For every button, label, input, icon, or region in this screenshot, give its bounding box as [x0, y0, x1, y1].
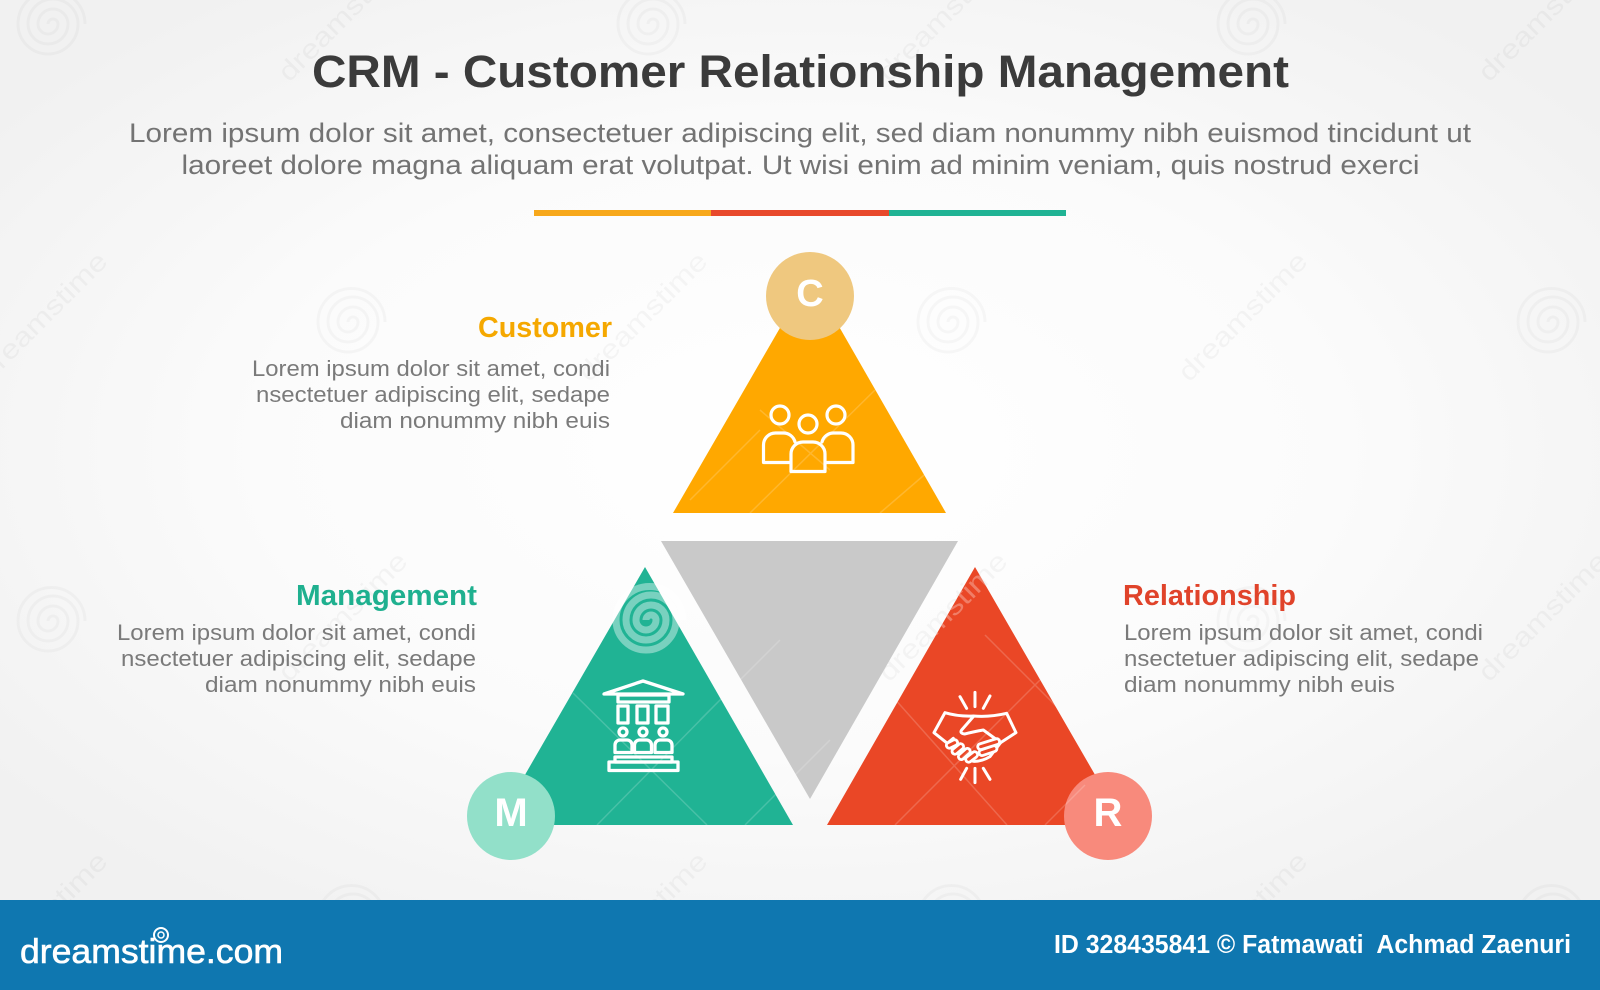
icon: handshake [934, 692, 1016, 783]
green triangle [496, 567, 793, 825]
circle badge C [766, 252, 854, 340]
circle badge R [1064, 772, 1152, 860]
footer credit: ID 328435841 © Fatmawati Achmad Zaenuri [1054, 931, 1571, 959]
circle badge R: R [1094, 791, 1123, 835]
tricolor divider [534, 210, 1066, 216]
subtitle: Lorem ipsum dolor sit amet, consectetuer adipiscing elit, sed diam nonummy nibh euismod tincidunt ut [129, 118, 1472, 148]
text block: customer: Lorem ipsum dolor sit amet, condi [252, 356, 610, 381]
subtitle: laoreet dolore magna aliquam erat volutpat. Ut wisi enim ad minim veniam, quis nostrud exerci [182, 150, 1420, 180]
watermark pattern: dreamstime [572, 846, 713, 987]
heading: Relationship: Relationship [1123, 580, 1296, 612]
text block: relationship: nsectetuer adipiscing elit, sedape [1124, 646, 1479, 671]
panel: management text [117, 580, 477, 697]
red triangle [827, 567, 1124, 825]
heading: Management: Management [296, 580, 477, 612]
text block: management: Lorem ipsum dolor sit amet, condi [117, 620, 476, 645]
panel: relationship text [1123, 580, 1483, 697]
circle badge M [467, 772, 555, 860]
text block: management [117, 620, 476, 697]
text block: relationship [1124, 620, 1483, 697]
panel: management triangle [467, 567, 793, 860]
orange triangle [673, 276, 946, 513]
watermark pattern: dreamstime [1172, 846, 1313, 987]
watermark pattern: dreamstime [1172, 246, 1313, 387]
footer banner [0, 900, 1600, 990]
icon: building with people [604, 681, 683, 770]
watermark lattice lines [573, 360, 1085, 825]
circle badge M: M [494, 791, 528, 835]
text block: management: nsectetuer adipiscing elit, sedape [121, 646, 476, 671]
text block: customer [252, 356, 610, 433]
watermark spiral on green triangle [616, 586, 683, 650]
heading: Customer: Customer [478, 312, 612, 344]
watermark pattern: dreamstime [872, 546, 1013, 687]
text block: management: diam nonummy nibh euis [205, 672, 476, 697]
watermark text on red triangle: dreamstime [872, 546, 1013, 687]
text block: relationship: diam nonummy nibh euis [1124, 672, 1395, 697]
panel: customer triangle [673, 252, 946, 513]
circle badge C: C [796, 273, 824, 315]
text block: customer: diam nonummy nibh euis [340, 408, 610, 433]
subtitle [129, 118, 1472, 180]
center gray triangle [661, 541, 958, 799]
watermark pattern: dreamstime [1472, 546, 1600, 687]
panel: relationship triangle [827, 546, 1152, 860]
title: CRM - Customer Relationship Management [312, 46, 1289, 97]
watermark pattern: dreamstime [572, 246, 713, 387]
icon: people group [764, 406, 853, 472]
watermark pattern: dreamstime [272, 546, 413, 687]
footer logo: dreamstime.com: dreamstime.com [20, 933, 283, 971]
text block: relationship: Lorem ipsum dolor sit amet, condi [1124, 620, 1483, 645]
panel: customer text [252, 312, 612, 433]
text block: customer: nsectetuer adipiscing elit, sedape [256, 382, 610, 407]
